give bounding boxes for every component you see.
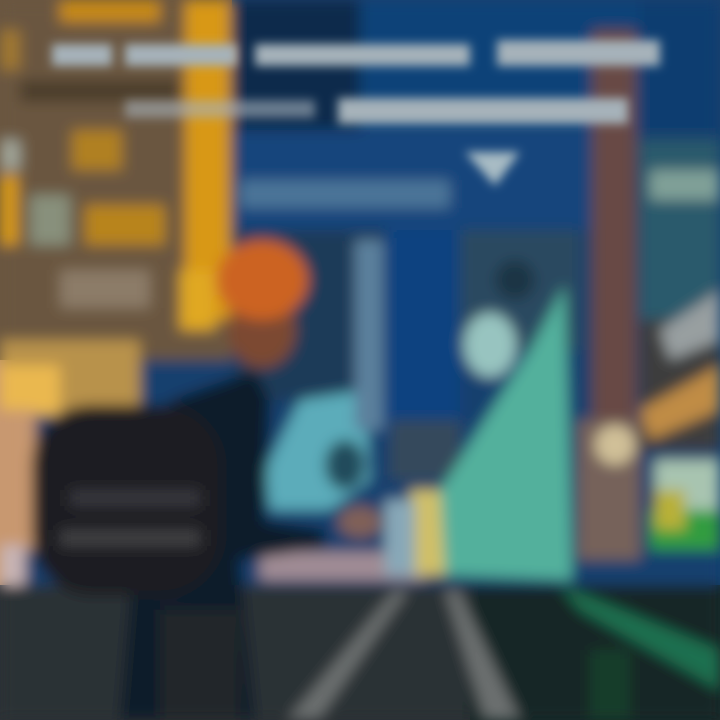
panel: right side shops (640, 170, 720, 550)
panel: tower on the right (578, 30, 640, 560)
backpack lower highlight (60, 530, 200, 546)
icon: small emblem (465, 152, 520, 186)
head (228, 292, 296, 368)
panel: street and railing (0, 585, 720, 720)
panel: teal sculpture (440, 260, 572, 580)
title (52, 40, 660, 124)
backpack highlight (70, 490, 200, 506)
panel: colourful street level strip (0, 490, 445, 585)
body (120, 370, 325, 720)
backpack (32, 405, 222, 595)
panel: glass feature behind figure (240, 180, 450, 510)
legs highlight (160, 610, 240, 720)
orange hat (216, 240, 308, 320)
panel: person with backpack (32, 240, 382, 720)
panel: amber building on the left (0, 0, 232, 550)
hand (338, 506, 382, 538)
